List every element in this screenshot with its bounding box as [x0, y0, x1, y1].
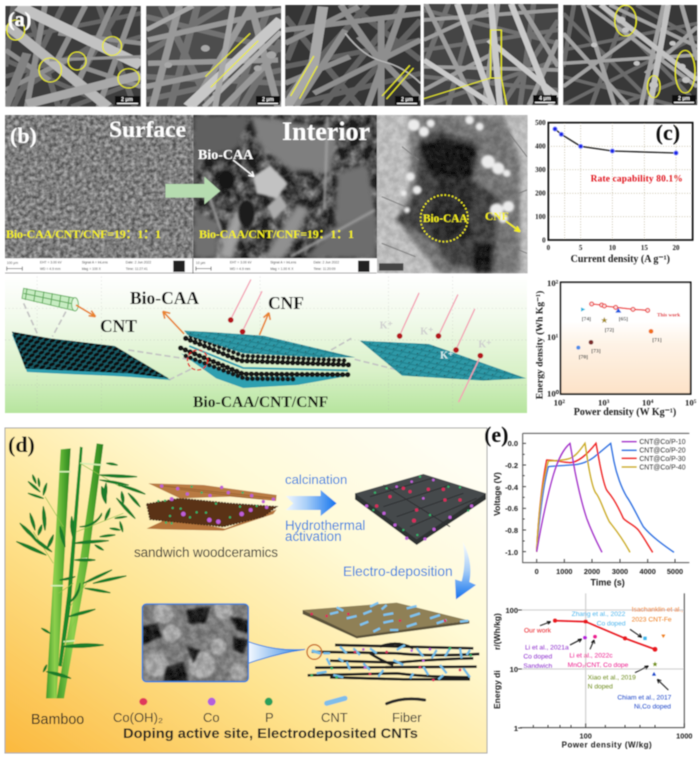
x ticks: 100: [580, 732, 592, 741]
x ticks: 15: [641, 244, 648, 252]
reference labels: [71]: [652, 338, 662, 344]
legend: CNT@Co/P-10: [639, 439, 686, 446]
legend labels: P: [265, 710, 274, 725]
x ticks: 10: [609, 244, 616, 252]
info strips under SEM images: Signal A = InLens: [270, 261, 297, 265]
x ticks: 2000: [584, 567, 600, 576]
annotations: Co doped: [523, 654, 552, 661]
x ticks: 0: [547, 244, 551, 252]
callout wedge: [248, 642, 305, 663]
arrow: surface to interior: [166, 177, 220, 204]
panel (d): bamboo-derived electrode schematic: [5, 428, 487, 753]
CNT-decorated sheet: [12, 332, 171, 380]
y ticks for voltage: -0.4: [505, 483, 519, 492]
panel (c): Ragone plot: [534, 278, 697, 418]
caption: surface ratio: Bio-CAA/CNT/CNF=19：1：1: [6, 227, 161, 241]
K+ ions: [228, 317, 483, 358]
annotations: N doped: [588, 684, 613, 691]
y ticks: 0: [542, 236, 546, 244]
label: Bio-CAA TEM: Bio-CAA: [423, 213, 468, 225]
info strips under SEM images: 10 μm: [196, 261, 206, 265]
x ticks: 4000: [640, 567, 656, 576]
annotations: Co doped: [597, 620, 626, 627]
x ticks: [547, 244, 680, 252]
scale bars: 2 μm: [678, 96, 690, 102]
y ticks: 500: [535, 119, 546, 127]
annotations: Our work: [524, 628, 552, 635]
info strips under SEM images: 100 μm: [7, 261, 18, 265]
info strips under SEM images: [5, 258, 377, 273]
scale bars: 4 μm: [539, 96, 551, 102]
ticks: 10⁰: [547, 389, 560, 399]
this work series: [590, 302, 650, 312]
label (c): (c): [656, 120, 680, 145]
annotations: 2023 CNT-Fe: [632, 617, 672, 624]
x ticks: 3000: [612, 567, 628, 576]
caption: doping active site: Doping active site, Electrodeposited CNTs: [123, 725, 418, 741]
K+ labels: [380, 320, 492, 361]
heading: Surface: Surface: [109, 117, 186, 143]
ticks: 10²: [547, 278, 559, 288]
reference labels: [72]: [605, 327, 614, 333]
x ticks: 20: [673, 244, 680, 252]
info strips under SEM images: WD = 4.9 mm: [40, 267, 61, 271]
calcined plate: [355, 474, 486, 545]
comparison points: [576, 307, 653, 350]
micrograph a4: [424, 4, 558, 105]
reference labels: [73]: [591, 349, 601, 355]
micrograph: TEM: [377, 115, 528, 273]
annotations: Li et al., 2021a: [525, 645, 569, 652]
heading: Interior: Interior: [282, 117, 370, 146]
label: CNF TEM: CNF: [485, 211, 509, 223]
K+ ion trails: [232, 280, 479, 402]
K+ labels: K⁺: [440, 350, 453, 361]
y-axis title: energy density: Energy di: [492, 670, 502, 709]
label: Bio-CAA: Bio-CAA: [130, 288, 199, 308]
annotations: Sandwich: [523, 663, 552, 670]
micrograph: interior: [193, 115, 377, 258]
scale bars: 2 μm: [401, 97, 413, 103]
info strips under SEM images: WD = 4.9 mm: [230, 267, 251, 271]
panel (c): rate capability line chart: [535, 119, 693, 265]
info strips under SEM images: Time: 11:20:09: [313, 267, 336, 271]
legend: CNT@Co/P-20: [639, 448, 686, 455]
y ticks: 200: [535, 190, 546, 198]
annotations: Ni,Co doped: [634, 703, 671, 710]
ticks: 10⁴: [642, 397, 654, 407]
label: CNT: CNT: [100, 316, 137, 336]
scale bars: [115, 95, 696, 105]
label: sandwich woodceramics: sandwich woodceramics: [134, 545, 278, 560]
y ticks for voltage: 0.0: [508, 439, 518, 448]
x ticks: 5000: [667, 567, 683, 576]
y-axis title: energy density: r/(Wh/kg): [492, 613, 502, 650]
ticks: 10³: [598, 397, 610, 407]
x ticks: 0: [535, 567, 539, 576]
panel (e): Ragone comparison chart: [520, 593, 692, 749]
x-axis title: Power density (W Kg⁻¹): [574, 407, 676, 418]
label: Bio-CAA interior: Bio-CAA: [198, 148, 254, 163]
rate curve: [553, 127, 678, 155]
legend labels: Fiber: [392, 710, 422, 725]
legend labels: Co(OH)₂: [113, 710, 163, 725]
y ticks for voltage: -0.8: [505, 526, 518, 535]
micrograph: surface: [5, 115, 193, 258]
reference labels: [579, 317, 662, 360]
info strips under SEM images: Mag = 100 X: [82, 267, 102, 271]
legend: CNT@Co/P-30: [639, 456, 686, 463]
dotted circle: Bio-CAA region: [421, 195, 468, 242]
arrow: electro-deposition: [455, 542, 476, 599]
heading label (b): (b): [10, 123, 37, 148]
ticks: 10¹: [547, 332, 559, 342]
curve: CNT@Co/P-10: [537, 443, 602, 552]
x-axis title: Power density (W/kg): [562, 740, 652, 749]
label: This work: This work: [657, 312, 680, 318]
x-axis title: Current density (A g⁻¹): [571, 254, 670, 265]
icon: carbon nanotube: [22, 288, 78, 311]
SEM inset: [142, 601, 248, 682]
annotations: MnO₂/CNT, Co dope: [568, 662, 629, 669]
micrograph a5: [563, 5, 697, 105]
micrograph a2: [146, 6, 281, 107]
label: Hydrothermal activation: Hydrothermal: [285, 518, 365, 533]
our work series: [553, 619, 657, 652]
x ticks: [535, 567, 683, 576]
panel (b): surface, interior and TEM micrographs: [5, 115, 528, 273]
K+ labels: K⁺: [420, 326, 433, 337]
legend labels: Co: [203, 710, 220, 725]
annotations: [523, 607, 683, 710]
y ticks for energy density: 10: [510, 665, 518, 674]
label: Electro-deposition: Electro-deposition: [343, 564, 453, 579]
arrow: CNF pointer: [506, 221, 520, 232]
label (e): (e): [484, 422, 508, 447]
label: Bamboo: Bamboo: [31, 712, 84, 728]
legend icons: [139, 698, 425, 706]
annotations: Chiam et al., 2017: [617, 694, 672, 701]
label (a): (a): [8, 9, 31, 31]
info strips under SEM images: EHT = 3.00 kV: [230, 261, 252, 265]
info strips under SEM images: Date: 2 Jun 2022: [313, 261, 339, 265]
ticks: [547, 278, 697, 407]
label (d): (d): [8, 432, 35, 457]
info strips under SEM images: Date: 2 Jun 2022: [126, 261, 151, 265]
y ticks for voltage: -0.2: [505, 461, 518, 470]
y ticks for voltage: -1.0: [505, 548, 518, 557]
micrograph a1: [5, 6, 141, 107]
x ticks: [580, 732, 692, 741]
y ticks: [535, 119, 546, 244]
K+ labels: K⁺: [380, 320, 393, 331]
layered composite stack: [181, 331, 355, 388]
curve: CNT@Co/P-30: [537, 443, 653, 552]
micrograph a3: [285, 5, 421, 106]
panel (a): five SEM fibre micrographs: [5, 4, 697, 107]
orange highlight circle: [307, 645, 322, 659]
y ticks for energy density: [505, 606, 518, 733]
reference labels: [70]: [579, 354, 588, 360]
orange pointer arrows: [76, 305, 270, 335]
arrow: calcination: [286, 490, 337, 516]
K+ labels: K⁺: [478, 339, 492, 350]
ticks: 10²: [554, 397, 565, 407]
annotations: Isachanklin et al.,: [632, 607, 683, 614]
label: Hydrothermal activation: activation: [285, 529, 342, 544]
info strips under SEM images: Mag = 1.00 K X: [270, 267, 294, 271]
legend: CNT@Co/P-40: [639, 464, 686, 471]
y-axis title: energy density: [492, 613, 502, 709]
x ticks: 5: [579, 244, 583, 252]
info strips under SEM images: Time: 11:27:41: [126, 267, 148, 271]
arrow: Bio-CAA pointer: [233, 160, 254, 177]
y ticks for voltage: [505, 439, 519, 557]
reference labels: [65]: [619, 317, 628, 323]
y-axis title: Voltage: Voltage (V): [492, 472, 502, 516]
legend: [622, 439, 686, 471]
legend labels: CNT: [321, 710, 348, 725]
x ticks: 1000: [556, 567, 572, 576]
annotations: Xiao et al., 2019: [588, 674, 636, 681]
scale bars: 2 μm: [262, 97, 274, 103]
y ticks: 400: [535, 143, 546, 151]
sandwich woodceramics illustration: [147, 483, 277, 531]
y ticks for voltage: -0.6: [505, 504, 518, 513]
annotation: rate capability: Rate capability 80.1%: [591, 175, 683, 185]
bare teal sheet: [360, 341, 526, 381]
scale bars: 2 μm: [121, 97, 133, 103]
ticks: 10⁵: [685, 397, 697, 407]
x-axis title: Time (s): [591, 578, 625, 588]
curve: CNT@Co/P-40: [537, 443, 630, 552]
annotations: Zhang et al., 2022: [572, 611, 626, 618]
y ticks: 100: [535, 213, 546, 221]
pointer arrows: [540, 622, 668, 690]
comparison markers: [583, 635, 665, 676]
info strips under SEM images: EHT = 3.00 kV: [40, 261, 63, 265]
label: calcination: calcination: [285, 472, 347, 487]
bamboo: [17, 443, 145, 698]
y ticks for energy density: 1: [514, 724, 518, 733]
CNT-coated plate: [303, 603, 469, 638]
curve: CNT@Co/P-20: [537, 443, 674, 552]
y-axis title: Energy density (Wh Kg⁻¹): [534, 291, 545, 399]
info strips under SEM images: Signal A = InLens: [82, 261, 108, 265]
caption: Bio-CAA/CNT/CNF: Bio-CAA/CNT/CNF: [193, 394, 328, 411]
panel (b): schematic of Bio-CAA/CNT/CNF structure: [5, 275, 527, 413]
dashed guide lines: [24, 303, 395, 380]
reference labels: [74]: [582, 317, 591, 323]
legend labels: [113, 710, 422, 725]
label: CNF: CNF: [268, 293, 304, 313]
x ticks: 1000: [676, 732, 692, 741]
red dashed circle: [187, 350, 208, 370]
fibre network with nanotubes: [308, 644, 479, 681]
y ticks for energy density: 100: [505, 606, 518, 615]
caption: interior ratio: Bio-CAA/CNT/CNF=19：1：1: [199, 227, 354, 241]
y ticks: 300: [535, 166, 546, 174]
annotations: Li et al., 2022c: [569, 652, 613, 659]
panel (e): galvanostatic charge-discharge chart: [523, 433, 689, 588]
